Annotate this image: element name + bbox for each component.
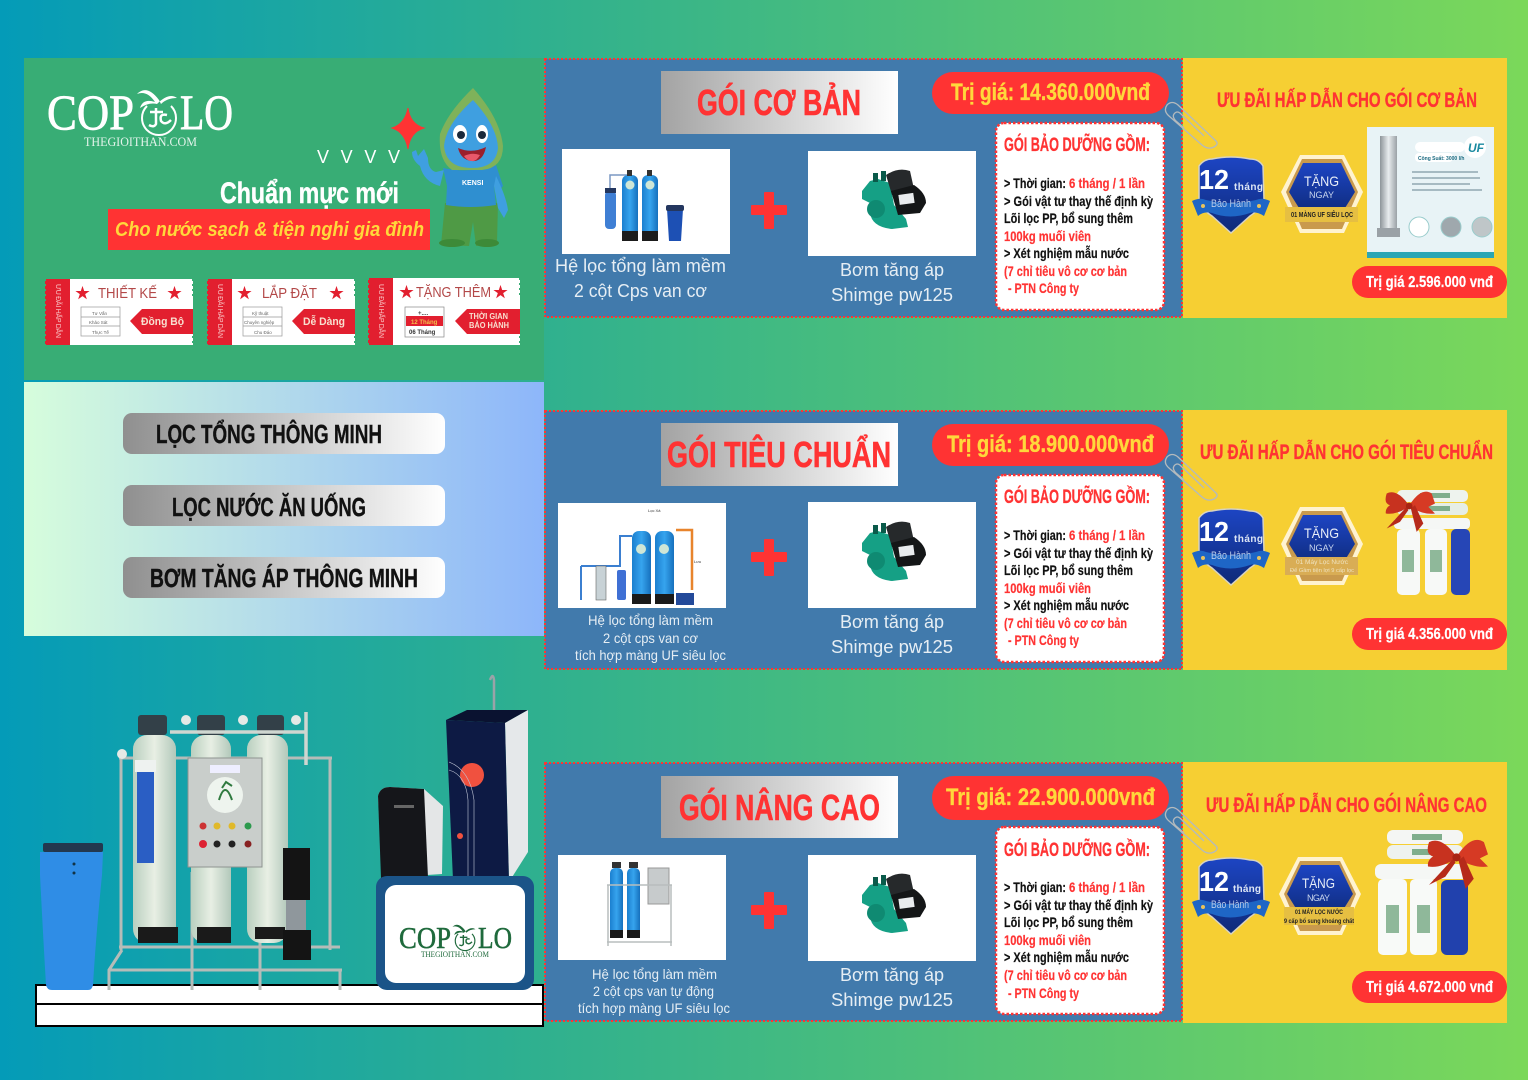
caption: filter xyxy=(578,966,730,1016)
icon: gift badge: Để Gầm tiện lợi 9 cấp lọc xyxy=(1290,567,1354,574)
product: filter with UF: Lưu xyxy=(694,559,701,564)
value pill xyxy=(1352,971,1507,1003)
logo: Copolo: THEGIOITHAN.COM xyxy=(84,134,197,149)
stand with logo: COP xyxy=(399,920,451,955)
icon: warranty badge: Bảo Hành xyxy=(1211,550,1251,562)
icon: industrial filter system xyxy=(109,712,342,990)
ticket: lắp đặt xyxy=(207,279,355,345)
caption: filter: 2 cột cps van cơ xyxy=(603,630,698,646)
panel: ưu đãi nâng cao xyxy=(1183,762,1507,1023)
value pill: Trị giá 2.596.000 vnđ xyxy=(1366,274,1493,291)
maintenance box: > Gói vật tư thay thế định kỳ xyxy=(1004,545,1153,561)
maintenance box: (7 chỉ tiêu vô cơ cơ bản xyxy=(1004,967,1127,983)
ticket: tặng thêm: +.... xyxy=(418,311,429,317)
ticket: thiết kế xyxy=(45,279,193,345)
ticket: lắp đặt: LẮP ĐẶT xyxy=(262,284,317,302)
ticket: thiết kế: ★ xyxy=(167,285,182,302)
title: GÓI TIÊU CHUẨN xyxy=(667,433,891,475)
icon: gift badge: NGAY xyxy=(1307,893,1330,903)
tagline banner xyxy=(108,209,430,250)
value pill: Trị giá 4.356.000 vnđ xyxy=(1366,626,1493,643)
maintenance box: Lõi lọc PP, bổ sung thêm xyxy=(1004,562,1133,578)
icon: black under-sink purifier xyxy=(378,787,443,878)
icon: plus xyxy=(752,193,786,228)
button: lọc nước ăn uống xyxy=(123,485,445,526)
stand with logo: THEGIOITHAN.COM xyxy=(421,950,489,959)
caption: pump: Shimge pw125 xyxy=(831,637,953,657)
product: pump xyxy=(808,855,976,961)
icon: gift badge: TẶNG xyxy=(1304,173,1339,189)
panel: product categories xyxy=(24,382,544,636)
title xyxy=(661,423,898,486)
maintenance box: GÓI BẢO DƯỠNG GỒM: xyxy=(1004,839,1150,861)
icon: gift badge: TẶNG xyxy=(1304,525,1339,541)
ticket: tặng thêm xyxy=(368,278,520,345)
ticket: thiết kế: THIẾT KẾ xyxy=(98,285,157,302)
price pill: Trị giá: 14.360.000vnđ xyxy=(951,79,1150,106)
icon: navy RO purifier tower xyxy=(446,676,528,882)
ticket: thiết kế: Đồng Bộ xyxy=(141,316,184,328)
ticket: lắp đặt: ★ xyxy=(329,285,344,302)
maintenance box: > Gói vật tư thay thế định kỳ xyxy=(1004,897,1153,913)
caption: pump: Shimge pw125 xyxy=(831,990,953,1010)
caption: pump xyxy=(831,965,953,1010)
icon: blue salt tank xyxy=(40,843,103,990)
maintenance box: > Xét nghiệm mẫu nước xyxy=(1004,245,1129,261)
value pill: Trị giá 4.672.000 vnđ xyxy=(1366,979,1493,996)
ticket: thiết kế: ★ xyxy=(75,285,90,302)
maintenance box: GÓI BẢO DƯỠNG GỒM: xyxy=(1004,134,1150,156)
icon: red sparkle xyxy=(392,108,424,149)
button: bơm tăng áp thông minh xyxy=(123,557,445,598)
maintenance box xyxy=(996,827,1164,1014)
icon: water drop mascot xyxy=(412,88,508,247)
maintenance box: 100kg muối viên xyxy=(1004,580,1091,596)
caption: filter: tích hợp màng UF siêu lọc xyxy=(578,1000,730,1016)
maintenance box: 100kg muối viên xyxy=(1004,932,1091,948)
icon: warranty badge: 12 xyxy=(1199,866,1229,897)
caption: filter: 2 cột cps van tự động xyxy=(593,983,714,999)
panel: ưu đãi cơ bản xyxy=(1183,58,1507,318)
price pill xyxy=(932,424,1169,466)
decorative chevrons: V V V V xyxy=(317,147,400,167)
caption: filter xyxy=(555,256,726,301)
product: filter auto valve xyxy=(558,855,726,960)
icon: gift badge: 9 cấp bổ sung khoáng chất xyxy=(1284,918,1354,925)
icon: paperclip xyxy=(1165,808,1217,853)
button: lọc tổng thông minh xyxy=(123,413,445,454)
icon: paperclip xyxy=(1165,102,1217,148)
icon: gift badge: 01 Máy Lọc Nước xyxy=(1296,560,1348,566)
icon: water drop mascot: KENSI xyxy=(462,180,483,187)
icon: warranty badge: tháng xyxy=(1233,884,1261,895)
caption: pump: Bơm tăng áp xyxy=(840,612,944,632)
icon: plus xyxy=(752,540,786,575)
product: filter xyxy=(562,149,730,254)
price pill: Trị giá: 22.900.000vnđ xyxy=(946,784,1155,811)
icon: warranty badge xyxy=(1192,509,1270,585)
caption: pump: Shimge pw125 xyxy=(831,285,953,305)
maintenance box: - PTN Công ty xyxy=(1008,280,1079,296)
title: GÓI NÂNG CAO xyxy=(679,786,880,828)
icon: warranty badge: 12 xyxy=(1199,516,1229,547)
maintenance box: (7 chỉ tiêu vô cơ cơ bản xyxy=(1004,263,1127,279)
maintenance box: GÓI BẢO DƯỠNG GỒM: xyxy=(1004,486,1150,508)
price pill: Trị giá: 18.900.000vnđ xyxy=(947,431,1154,458)
icon: paperclip xyxy=(1165,454,1217,500)
icon: gift badge: 01 MÁY LỌC NƯỚC xyxy=(1295,908,1344,916)
icon: warranty badge: tháng xyxy=(1234,182,1263,193)
icon: gift badge xyxy=(1281,155,1363,233)
caption: pump xyxy=(831,260,953,305)
icon: warranty badge: Bảo Hành xyxy=(1211,899,1249,911)
caption: filter: tích hợp màng UF siêu lọc xyxy=(575,647,726,663)
icon: gift badge xyxy=(1281,507,1363,585)
ticket: thiết kế: ƯU ĐÃI HẤP DẪN xyxy=(54,284,64,338)
panel: brand header xyxy=(24,58,544,380)
icon: warranty badge xyxy=(1192,157,1270,233)
button: lọc nước ăn uống: LỌC NƯỚC ĂN UỐNG xyxy=(172,492,366,522)
ticket: tặng thêm: ƯU ĐÃI HẤP DẪN xyxy=(377,284,387,338)
maintenance box: 6 tháng / 1 lần xyxy=(1069,175,1145,191)
product: RO filter with bow xyxy=(1375,830,1488,955)
maintenance box: (7 chỉ tiêu vô cơ cơ bản xyxy=(1004,615,1127,631)
ticket: tặng thêm: 06 Tháng xyxy=(409,330,436,336)
icon: gift badge: 01 MÀNG UF SIÊU LỌC xyxy=(1291,210,1353,219)
maintenance box: 100kg muối viên xyxy=(1004,228,1091,244)
caption: filter: Hệ lọc tổng làm mềm xyxy=(588,612,713,628)
price pill xyxy=(932,72,1169,114)
maintenance box xyxy=(996,123,1164,310)
logo: Copolo: LO xyxy=(180,84,233,140)
stand with logo xyxy=(376,876,534,990)
ticket: lắp đặt: ★ xyxy=(237,285,252,302)
ticket: tặng thêm: ★ xyxy=(493,284,508,301)
title xyxy=(661,71,898,134)
icon: gift badge: NGAY xyxy=(1309,190,1334,200)
ticket: lắp đặt: Kỹ thuật xyxy=(252,311,269,316)
logo: Copolo: COP xyxy=(47,84,134,140)
maintenance box: > Gói vật tư thay thế định kỳ xyxy=(1004,193,1153,209)
platform xyxy=(36,985,543,1026)
product: pump xyxy=(808,151,976,256)
product: RO filter with bow xyxy=(1386,490,1470,595)
ticket: tặng thêm: ★ xyxy=(399,284,414,301)
product: UF membrane: UF xyxy=(1468,141,1485,155)
maintenance box: > Xét nghiệm mẫu nước xyxy=(1004,949,1129,965)
caption: filter: Hệ lọc tổng làm mềm xyxy=(555,256,726,276)
tagline banner: Cho nước sạch & tiện nghi gia đình xyxy=(115,219,424,241)
panel: gói tiêu chuẩn xyxy=(545,411,1182,669)
value pill xyxy=(1352,618,1507,650)
ticket: tặng thêm: THỜI GIAN xyxy=(469,312,508,321)
maintenance box: Lõi lọc PP, bổ sung thêm xyxy=(1004,210,1133,226)
caption: filter: 2 cột Cps van cơ xyxy=(574,281,707,301)
panel: ưu đãi tiêu chuẩn xyxy=(1183,410,1507,670)
stand with logo: LO xyxy=(478,920,512,955)
caption: pump: Bơm tăng áp xyxy=(840,965,944,985)
button: bơm tăng áp thông minh: BƠM TĂNG ÁP THÔNG MINH xyxy=(150,563,418,593)
product: UF membrane xyxy=(1367,127,1494,258)
logo: Copolo xyxy=(47,84,233,149)
ticket: tặng thêm: 12 Tháng xyxy=(411,320,438,326)
maintenance box: - PTN Công ty xyxy=(1008,985,1079,1001)
panel: gói nâng cao xyxy=(545,763,1182,1021)
product: UF membrane: Công Suất: 3000 l/h xyxy=(1418,155,1464,162)
ticket: thiết kế: Tư Vấn xyxy=(92,311,108,316)
tagline: Chuẩn mực mới xyxy=(220,177,399,210)
ticket: lắp đặt: ƯU ĐÃI HẤP DẪN xyxy=(216,284,226,338)
ticket: lắp đặt: Chuyên nghiệp xyxy=(244,320,275,325)
icon: warranty badge: Bảo Hành xyxy=(1211,198,1251,210)
icon: warranty badge xyxy=(1192,858,1270,934)
caption: pump: Bơm tăng áp xyxy=(840,260,944,280)
icon: gift badge: NGAY xyxy=(1309,543,1334,553)
ticket: tặng thêm: BẢO HÀNH xyxy=(469,321,509,330)
maintenance box: > Xét nghiệm mẫu nước xyxy=(1004,597,1129,613)
title: GÓI CƠ BẢN xyxy=(697,81,861,123)
ticket: lắp đặt: Dễ Dàng xyxy=(303,315,345,328)
caption: filter xyxy=(575,612,726,663)
maintenance box: 6 tháng / 1 lần xyxy=(1069,527,1145,543)
ticket: lắp đặt: Chu Đáo xyxy=(254,330,272,335)
ticket: tặng thêm: TẶNG THÊM xyxy=(416,284,491,301)
button: lọc tổng thông minh: LỌC TỔNG THÔNG MINH xyxy=(156,419,382,449)
ticket: thiết kế: Khảo Sát xyxy=(89,320,108,325)
icon: gift badge xyxy=(1279,857,1361,935)
maintenance box: > Thời gian: xyxy=(1004,879,1066,895)
ticket: thiết kế: Thực Tế xyxy=(92,330,109,335)
caption: pump xyxy=(831,612,953,657)
product showcase: equipment on platform xyxy=(36,676,543,1026)
panel: gói cơ bản xyxy=(545,59,1182,317)
price pill xyxy=(932,776,1169,820)
maintenance box: 6 tháng / 1 lần xyxy=(1069,879,1145,895)
icon: gift badge: TẶNG xyxy=(1302,875,1335,891)
product: filter with UF xyxy=(558,503,726,608)
product: filter with UF: Lọc Xả xyxy=(648,508,661,513)
maintenance box xyxy=(996,475,1164,662)
value pill xyxy=(1352,266,1507,298)
maintenance box: - PTN Công ty xyxy=(1008,632,1079,648)
maintenance box: Lõi lọc PP, bổ sung thêm xyxy=(1004,914,1133,930)
maintenance box: > Thời gian: xyxy=(1004,527,1066,543)
maintenance box: > Thời gian: xyxy=(1004,175,1066,191)
icon: warranty badge: tháng xyxy=(1234,534,1263,545)
product: pump xyxy=(808,502,976,608)
icon: warranty badge: 12 xyxy=(1199,164,1229,195)
caption: filter: Hệ lọc tổng làm mềm xyxy=(592,966,717,982)
icon: plus xyxy=(752,893,786,928)
title xyxy=(661,776,898,838)
